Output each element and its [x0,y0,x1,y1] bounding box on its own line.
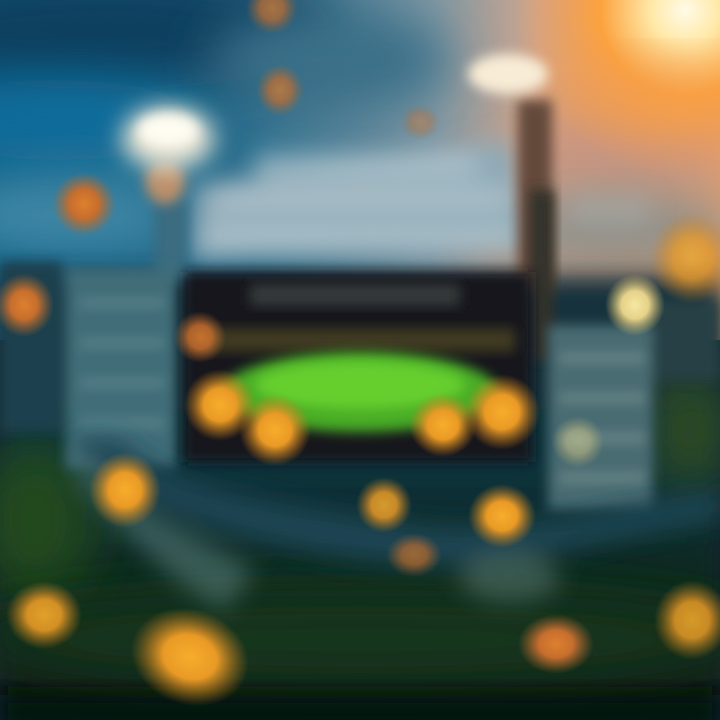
glowing orbs on screen [174,311,540,466]
sun glow [515,0,720,180]
right stand [548,300,720,510]
ground and foliage [0,275,720,720]
sky background [0,0,720,340]
green pitch [222,352,498,432]
pitch crowd band [200,328,515,352]
left stand [0,262,176,468]
right floodlight [468,54,554,360]
central screen panel [184,272,532,462]
screen heading [250,284,460,306]
heading block: blurred pale title area [190,140,650,262]
left floodlight [122,106,214,280]
stadium wall curve [70,440,720,610]
